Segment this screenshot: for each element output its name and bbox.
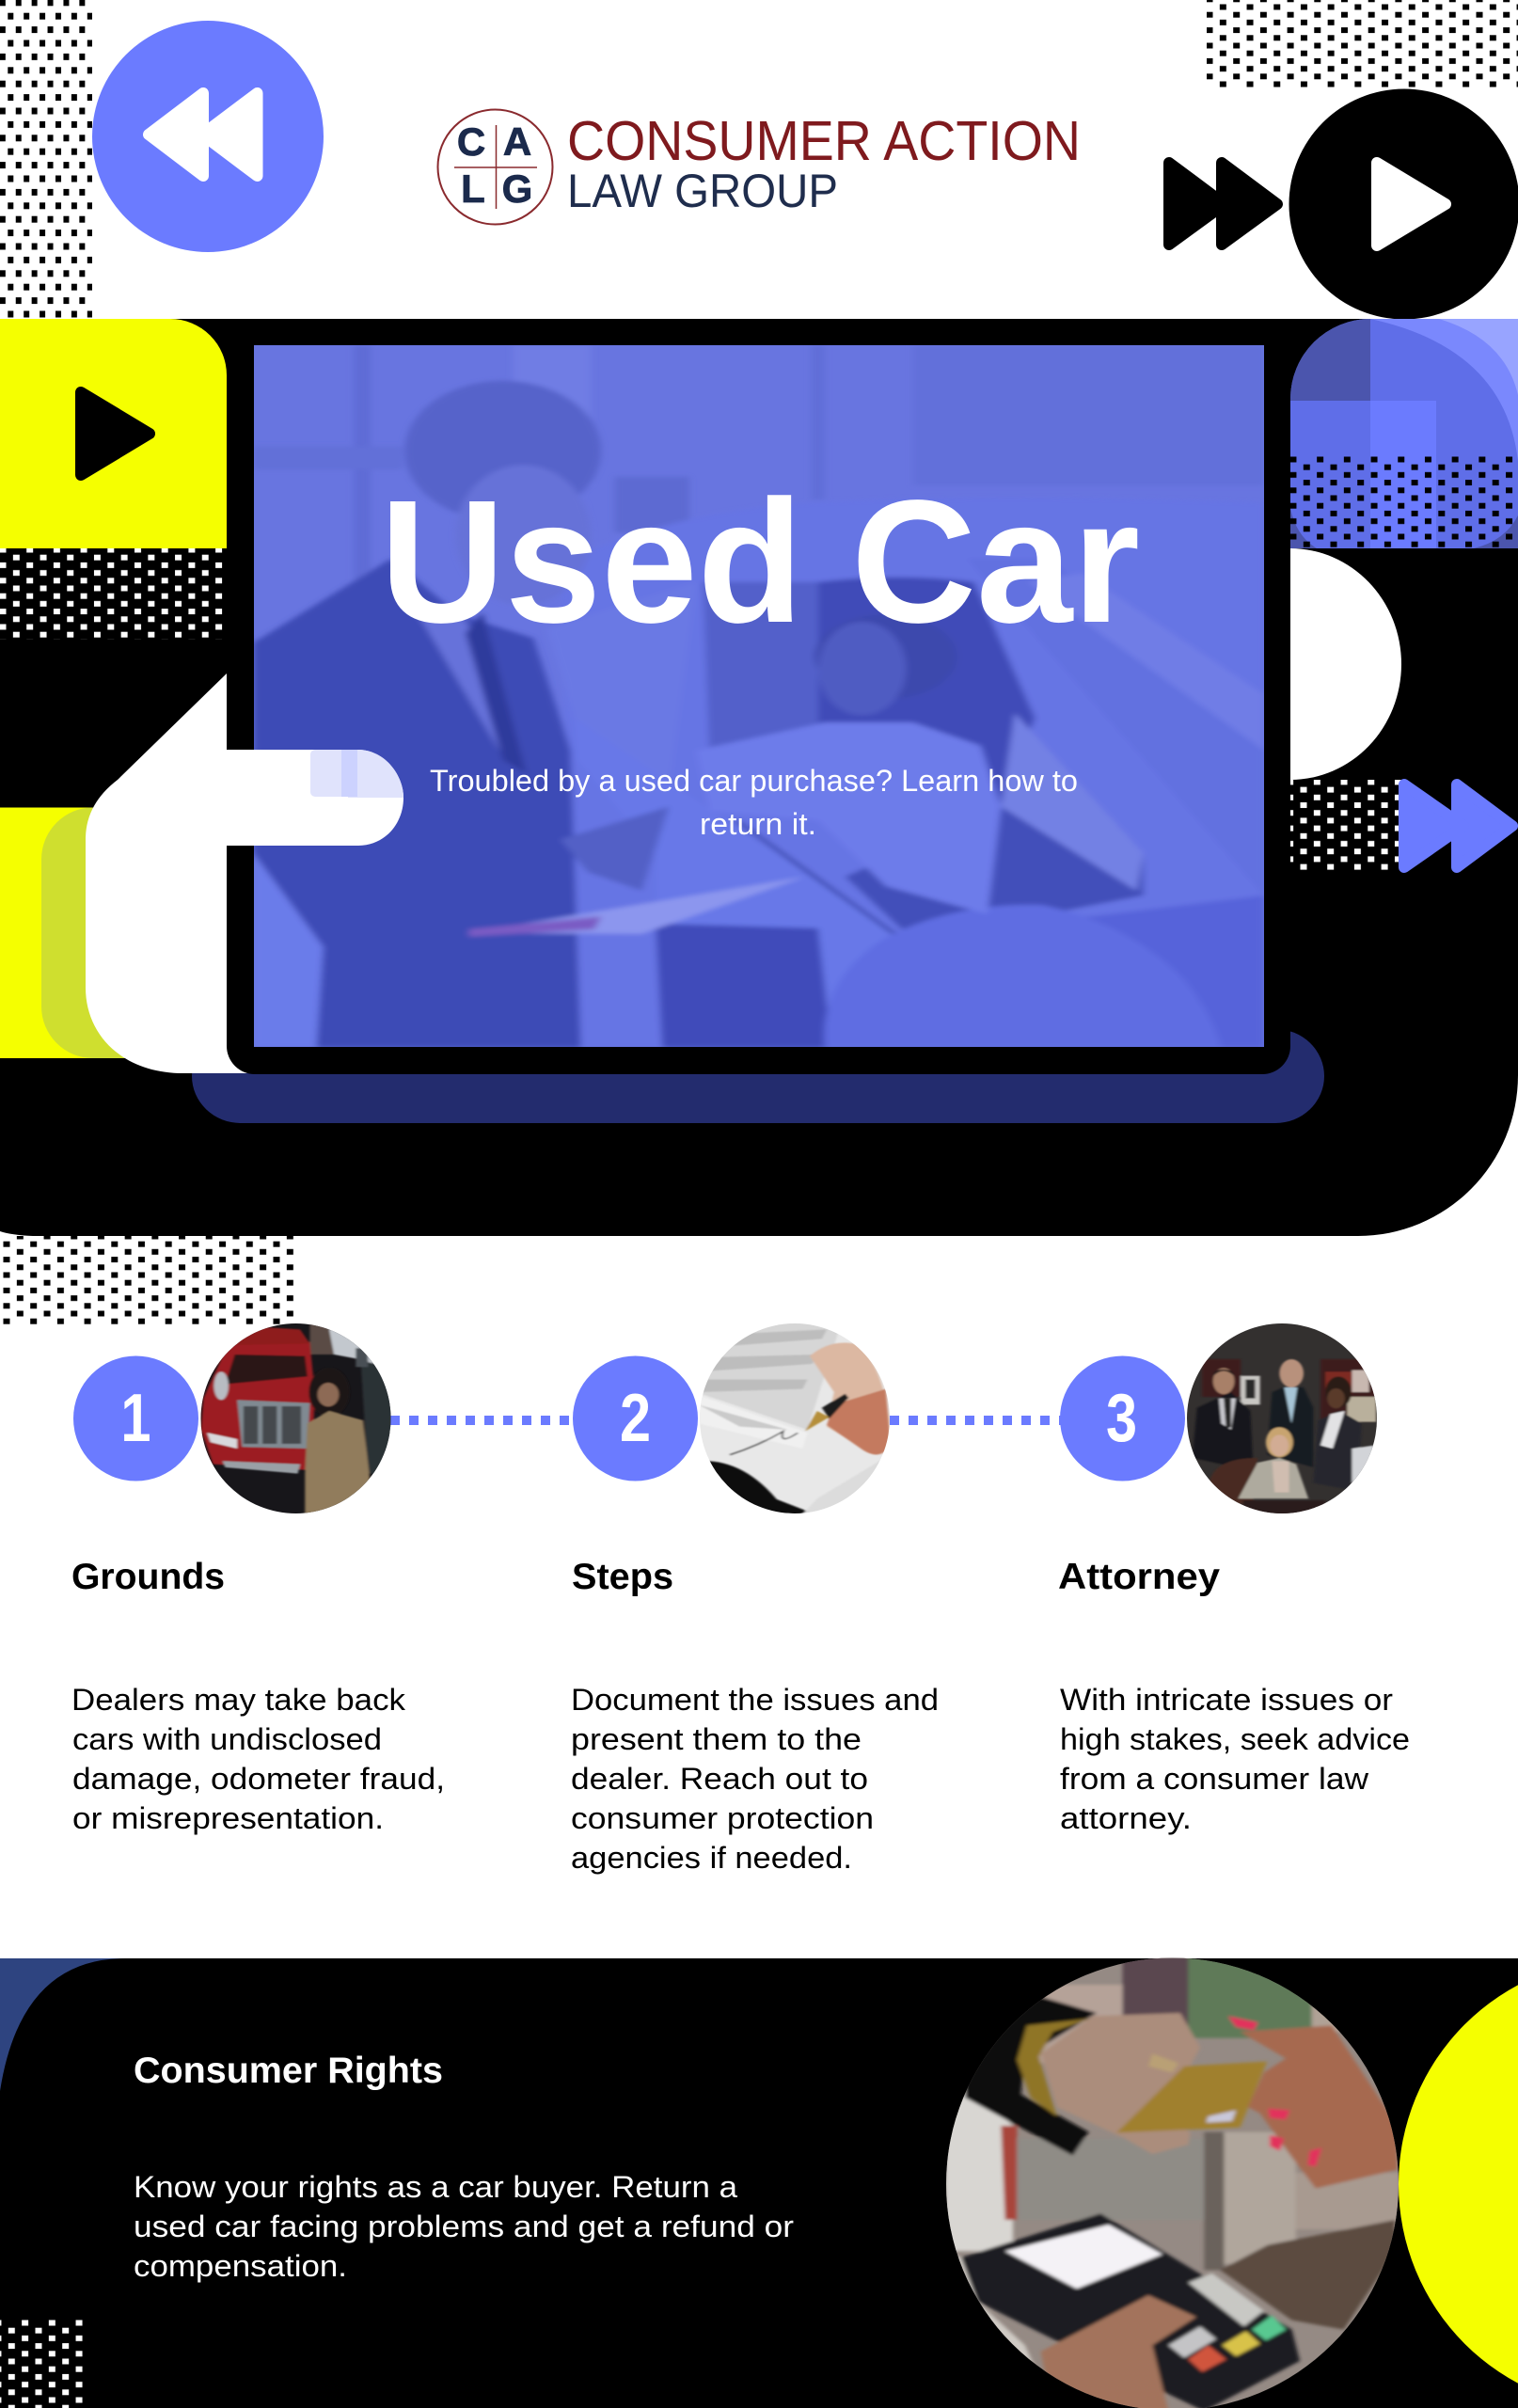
step 1 text: Grounds: cars with undisclosed <box>72 1722 382 1756</box>
white finger of the hand <box>227 750 403 846</box>
logo: Consumer Action Law Group: L <box>461 166 485 211</box>
step 2 text: Steps: present them to the <box>571 1722 862 1756</box>
step 2 text: Steps: consumer protection <box>571 1801 874 1835</box>
icon: play button <box>1289 88 1518 320</box>
logo: Consumer Action Law Group <box>438 109 1081 224</box>
consumer rights text <box>134 2051 794 2283</box>
logo: Consumer Action Law Group: C <box>457 119 485 164</box>
decorative dots under band <box>0 1236 296 1324</box>
logo: Consumer Action Law Group: A <box>503 119 531 164</box>
icon: blue fast forward arrows <box>1404 784 1512 867</box>
decorative white dots left <box>0 548 226 640</box>
photo: hand signing document <box>696 1323 891 1514</box>
white hand <box>86 673 268 1073</box>
logo: Consumer Action Law Group: LAW GROUP <box>567 165 838 217</box>
step 2 number <box>573 1356 698 1481</box>
consumer rights text: Consumer Rights <box>134 2051 443 2091</box>
step 2 text: Steps: Document the issues and <box>571 1683 939 1717</box>
step 1 number <box>73 1356 198 1481</box>
step 3 text: Attorney: Attorney <box>1058 1557 1220 1597</box>
step 2 text: Steps: agencies if needed. <box>571 1841 852 1875</box>
icon: rewind button <box>92 21 324 252</box>
decorative dots on blue block <box>1290 456 1518 548</box>
subtitle <box>430 764 1078 841</box>
black hero band <box>0 319 1518 1236</box>
step 3 text: Attorney: from a consumer law <box>1060 1762 1369 1796</box>
decorative dots: top left <box>0 0 92 319</box>
step 2 text: Steps: Steps <box>572 1557 673 1597</box>
blue block top right <box>1290 319 1518 548</box>
step 2 text: Steps: dealer. Reach out to <box>571 1762 868 1796</box>
subtitle: return it. <box>700 807 816 841</box>
yellow block with play icon <box>0 319 227 548</box>
consumer rights text: Know your rights as a car buyer. Return a <box>134 2170 737 2204</box>
title: Used Car <box>380 465 1140 659</box>
dotted connector 1 <box>390 1416 573 1425</box>
white half circle right <box>1290 548 1401 780</box>
step 1 text: Grounds: damage, odometer fraud, <box>72 1762 445 1796</box>
dotted connector 2 <box>890 1416 1061 1425</box>
step 1 number: 1 <box>120 1381 150 1456</box>
step 3 text: Attorney: With intricate issues or <box>1060 1683 1393 1717</box>
icon: fast forward arrows <box>1169 163 1277 245</box>
subtitle: Troubled by a used car purchase? Learn how to <box>430 764 1078 798</box>
step 3 text: Attorney: attorney. <box>1060 1801 1192 1835</box>
hero photo: dealer and car buyer with blue overlay <box>253 345 1264 1048</box>
logo: Consumer Action Law Group: G <box>502 166 532 211</box>
decorative white dots right <box>1290 780 1401 871</box>
step 1 text: Grounds <box>71 1557 445 1835</box>
step 1 text: Grounds: Grounds <box>71 1557 225 1597</box>
step 3 text: Attorney: high stakes, seek advice <box>1060 1722 1410 1756</box>
yellow circle <box>1399 1958 1518 2408</box>
step 3 number <box>1060 1356 1185 1481</box>
photo: card payment at terminal <box>945 1956 1399 2408</box>
step 1 text: Grounds: or misrepresentation. <box>72 1801 384 1835</box>
step 2 number: 2 <box>620 1381 651 1456</box>
step 3 number: 3 <box>1106 1381 1137 1456</box>
decorative white dots bottom left <box>0 2320 84 2408</box>
yellow lower block <box>0 807 211 1058</box>
consumer rights text: compensation. <box>134 2249 347 2283</box>
logo: Consumer Action Law Group: CONSUMER ACTION <box>567 110 1081 172</box>
decorative dots: top right <box>1207 0 1518 88</box>
photo: woman with red truck <box>200 1323 392 1514</box>
step 2 text: Steps <box>571 1557 939 1875</box>
step 3 text: Attorney <box>1058 1557 1410 1835</box>
step 1 text: Grounds: Dealers may take back <box>71 1683 406 1717</box>
navy corner behind bottom panel <box>0 1958 141 2099</box>
bottom black panel <box>0 1958 1518 2408</box>
photo: law firm team <box>1187 1323 1378 1514</box>
black screen frame <box>227 319 1290 1074</box>
navy screen shadow <box>192 1029 1324 1123</box>
consumer rights text: used car facing problems and get a refund or <box>134 2210 794 2243</box>
